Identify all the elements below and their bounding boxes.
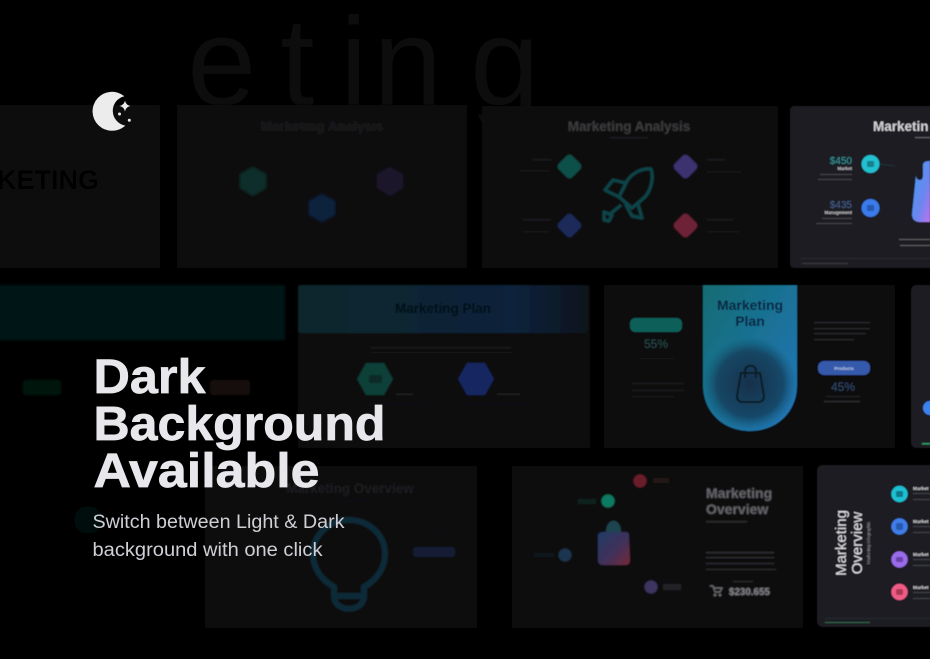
slide: Marketing bag bright: $450 — [830, 156, 852, 167]
icon: blue hexagon — [458, 363, 494, 395]
slide: Marketing Overview bright list: Market — [913, 486, 929, 492]
slide: right-edge bright sliver — [911, 285, 930, 448]
slide: Marketing Overview bright list: Market — [913, 552, 929, 558]
slide: Marketing Overview bright list — [817, 465, 930, 627]
slide: Marketing Overview bulb — [205, 466, 477, 628]
heading: Marketing Overview: Marketing — [706, 485, 772, 501]
icon: blue circle — [862, 199, 880, 217]
icon: rocket — [604, 169, 652, 221]
slide: Marketing bag bright: Marketin — [873, 119, 929, 134]
slide: Marketing bag bright: Market — [837, 166, 852, 171]
icon: purple diamond — [672, 153, 699, 180]
icon: teal diamond — [556, 153, 583, 180]
subtitle: Switch between Light & Dark — [92, 512, 345, 533]
heading: Marketing Overview: Overview — [706, 501, 768, 517]
icon: moon and stars — [93, 92, 131, 131]
slide: Marketing bag bright: $435 — [830, 200, 852, 211]
main title: Dark — [94, 351, 206, 404]
slide: bottom-left faint slide — [0, 465, 286, 628]
stat: 55 percent: 55% — [644, 337, 668, 351]
slide: Marketing Overview colored bag — [512, 466, 803, 628]
pill: right blue — [818, 361, 870, 375]
subtitle: background with one click — [92, 540, 323, 561]
slide: left teal-banded slide — [0, 285, 285, 448]
slide: cover MARKETING — [0, 105, 160, 268]
slide: Marketing Analysis rocket — [482, 106, 778, 268]
main title — [94, 351, 386, 498]
icon: pink — [891, 584, 908, 600]
icon: bag gradient — [598, 532, 630, 565]
main title: Available — [94, 445, 320, 498]
slide: Marketing Overview bright list: Market — [913, 519, 929, 525]
icon: cyan cart — [891, 486, 908, 502]
panel: teal to blue arch — [703, 285, 797, 431]
icon: blue diamond — [556, 212, 583, 239]
slide: Marketing bag bright — [790, 106, 930, 268]
slide: Marketing Plan banded: Marketing Plan — [395, 301, 491, 316]
subtitle — [92, 512, 345, 561]
shade behind bag icon — [703, 337, 797, 431]
heading: Marketing Plan: Marketing — [717, 297, 783, 313]
icon: red circle — [634, 474, 646, 488]
total amount: $230.655 — [729, 587, 770, 598]
main title: Background — [94, 398, 386, 451]
slide: Marketing Overview bright list: Market — [913, 585, 929, 591]
slide: Marketing Analysis hexagons — [177, 105, 467, 268]
icon: cyan circle — [862, 155, 880, 173]
slide: Marketing Overview bright list: Marketing infographic — [866, 521, 871, 565]
icon: shopping bag outline — [737, 366, 764, 402]
slide: Marketing Plan center panel: Products — [834, 366, 854, 371]
icon: cart — [710, 586, 722, 596]
icon: blue circle — [558, 548, 572, 562]
icon: green circle — [602, 494, 614, 508]
slide: Marketing Analysis rocket: Marketing Analysis — [568, 119, 690, 134]
icon: teal hexagon — [357, 363, 393, 395]
icon: purple — [891, 551, 908, 568]
icon: shopping bag — [912, 161, 930, 222]
slide: Marketing Plan center panel — [604, 285, 895, 448]
icon: red diamond — [672, 212, 699, 239]
pill: left teal — [630, 318, 682, 332]
slide: Marketing bag bright: Management — [824, 210, 852, 215]
icon: purple circle — [644, 580, 658, 594]
slide: Marketing Overview bulb: Marketing Overview — [286, 481, 414, 496]
pill: blue — [413, 547, 455, 557]
stat: 45 percent: 45% — [831, 380, 855, 394]
heading: Marketing Plan: Plan — [735, 313, 765, 329]
icon: light bulb — [313, 520, 385, 609]
slide: Marketing Overview bright list: Overview — [849, 512, 866, 574]
slide: Marketing Plan banded — [298, 285, 590, 448]
heading: vertical Marketing Overview: Marketing — [833, 510, 850, 576]
icon: blue — [891, 518, 908, 535]
slide: Marketing Analysis hexagons: Marketing Analysis — [261, 119, 383, 134]
